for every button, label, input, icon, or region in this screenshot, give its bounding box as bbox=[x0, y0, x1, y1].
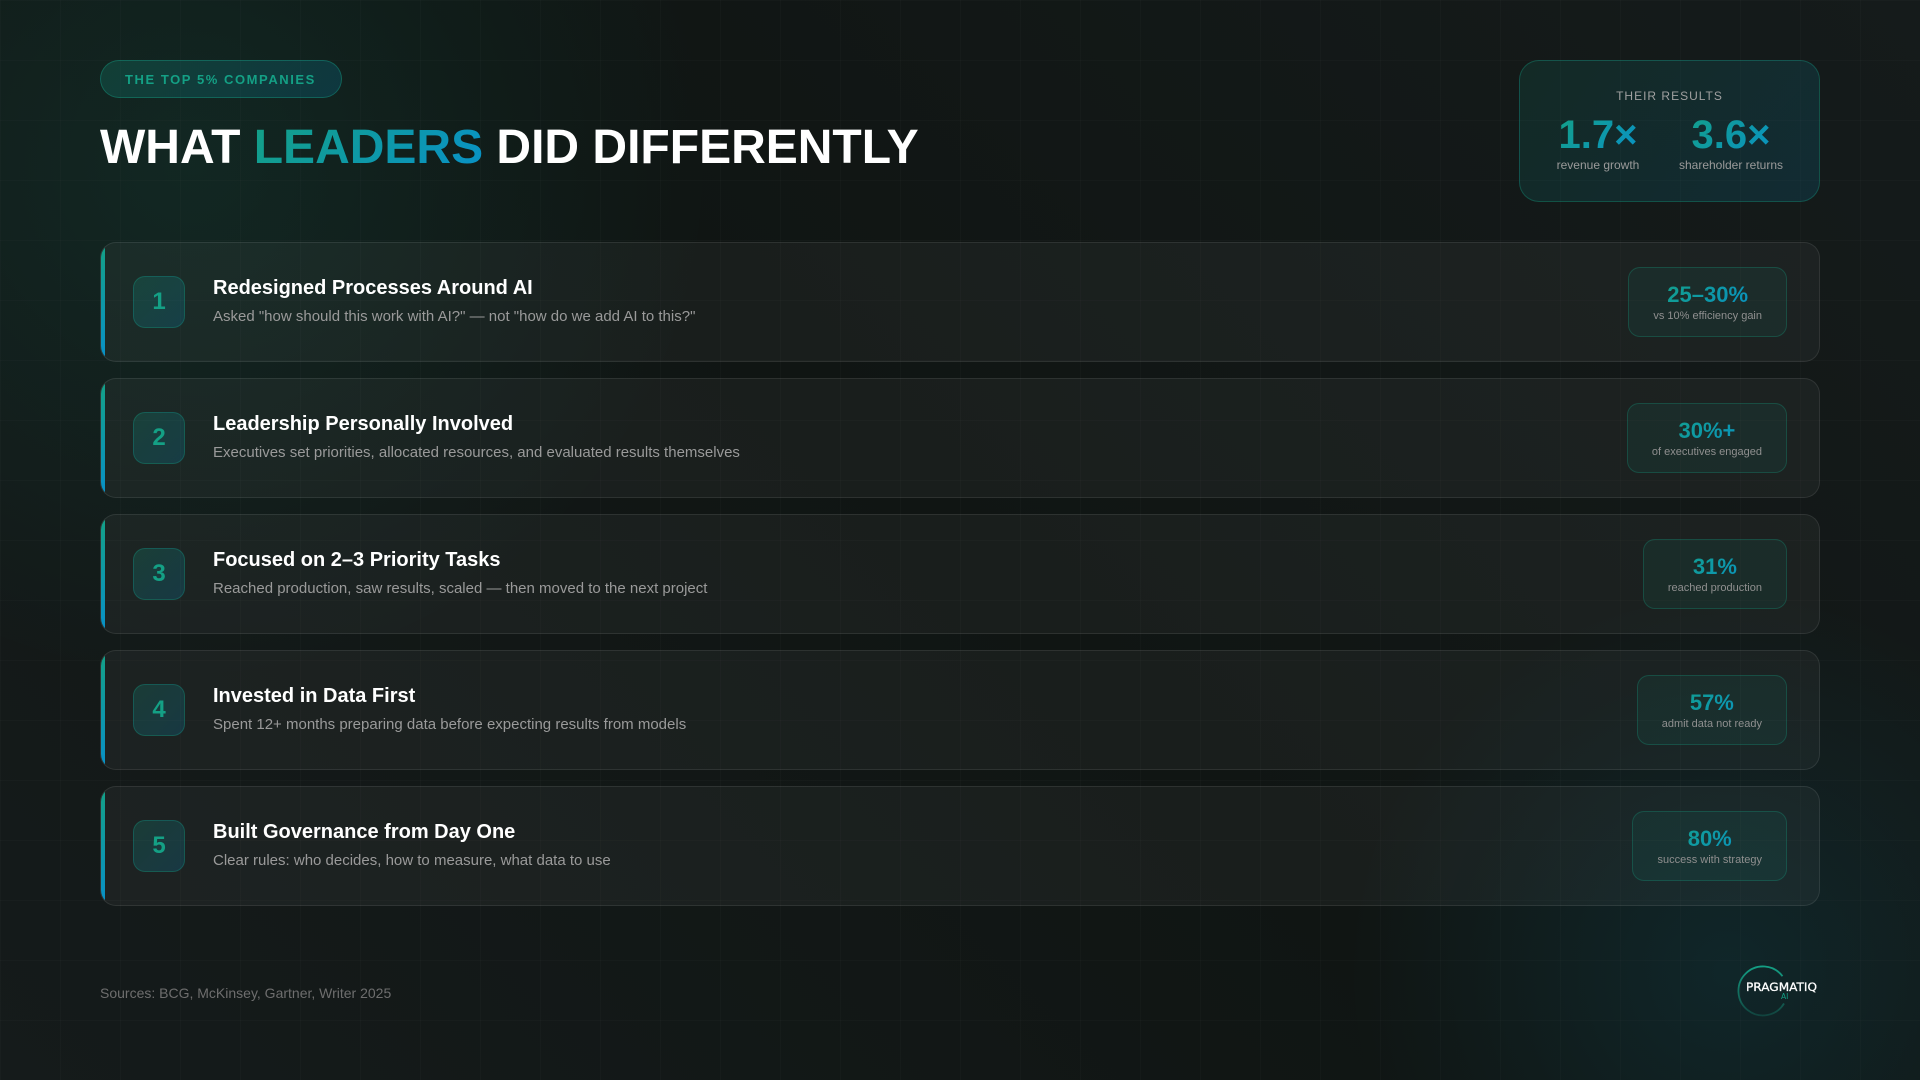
card 1 text bbox=[213, 277, 695, 325]
card 2 text: Leadership Personally Involved bbox=[213, 413, 513, 435]
number badge 1 bbox=[133, 276, 185, 328]
logo: pragmatiq ai: AI bbox=[1781, 992, 1788, 1001]
logo: pragmatiq ai: PRAGMATIQ bbox=[1746, 980, 1817, 994]
card 5 stat: success with strategy bbox=[1657, 854, 1762, 866]
number badge 2: 2 bbox=[152, 424, 166, 451]
logo: pragmatiq ai bbox=[1738, 966, 1817, 1016]
card 2 stat: of executives engaged bbox=[1652, 446, 1762, 458]
card 5 text: Clear rules: who decides, how to measure, what data to use bbox=[213, 852, 611, 869]
card 1: redesigned processes bbox=[100, 242, 1820, 362]
number badge 1: 1 bbox=[152, 288, 166, 315]
card 4 text bbox=[213, 685, 686, 733]
card 1 text: Redesigned Processes Around AI bbox=[213, 277, 533, 299]
number badge 3 bbox=[133, 548, 185, 600]
title: WHAT DID DIFFERENTLY bbox=[100, 121, 919, 174]
number badge 5: 5 bbox=[152, 832, 166, 859]
card 3 stat bbox=[1643, 539, 1787, 609]
stat: shareholder returns: shareholder returns bbox=[1679, 158, 1783, 172]
card 4: data first bbox=[100, 650, 1820, 770]
card 4 text: Invested in Data First bbox=[213, 685, 415, 707]
card 3 text bbox=[213, 549, 708, 597]
stat: shareholder returns: 3.6× bbox=[1692, 113, 1770, 157]
badge: the top 5% companies bbox=[100, 60, 342, 98]
card 2 stat: 30%+ bbox=[1678, 418, 1735, 443]
badge: the top 5% companies: THE TOP 5% COMPANIES bbox=[125, 72, 316, 87]
card 2 text bbox=[213, 413, 740, 461]
card 4 text: Spent 12+ months preparing data before expecting results from models bbox=[213, 716, 686, 733]
title: LEADERS bbox=[254, 121, 483, 174]
stat: revenue growth: 1.7× bbox=[1559, 113, 1637, 157]
card 2 stat bbox=[1627, 403, 1787, 473]
card 2: leadership involved bbox=[100, 378, 1820, 498]
card 5 text: Built Governance from Day One bbox=[213, 821, 515, 843]
card 1 stat: 25–30% bbox=[1667, 282, 1748, 307]
card 3 stat: reached production bbox=[1668, 582, 1762, 594]
card 4 stat: admit data not ready bbox=[1662, 718, 1762, 730]
card 4 stat: 57% bbox=[1690, 690, 1734, 715]
card 2 text: Executives set priorities, allocated resources, and evaluated results themselves bbox=[213, 444, 740, 461]
results label: THEIR RESULTS bbox=[1616, 89, 1723, 103]
panel: their results bbox=[1519, 60, 1820, 202]
number badge 4 bbox=[133, 684, 185, 736]
stat: revenue growth: revenue growth bbox=[1557, 158, 1639, 172]
card 4 stat bbox=[1637, 675, 1787, 745]
stat: shareholder returns bbox=[1679, 113, 1783, 172]
card 5 text bbox=[213, 821, 611, 869]
card 5: governance bbox=[100, 786, 1820, 906]
sources: Sources: BCG, McKinsey, Gartner, Writer 2025 bbox=[100, 985, 391, 1001]
number badge 2 bbox=[133, 412, 185, 464]
card 3 text: Focused on 2–3 Priority Tasks bbox=[213, 549, 501, 571]
number badge 4: 4 bbox=[152, 696, 166, 723]
card 5 stat bbox=[1632, 811, 1787, 881]
card 1 stat bbox=[1628, 267, 1787, 337]
card 3: priority tasks bbox=[100, 514, 1820, 634]
card 1 text: Asked "how should this work with AI?" — not "how do we add AI to this?" bbox=[213, 308, 695, 325]
number badge 5 bbox=[133, 820, 185, 872]
card 3 text: Reached production, saw results, scaled — then moved to the next project bbox=[213, 580, 707, 597]
number badge 3: 3 bbox=[152, 560, 166, 587]
card 1 stat: vs 10% efficiency gain bbox=[1653, 310, 1762, 322]
card 5 stat: 80% bbox=[1688, 826, 1732, 851]
card 3 stat: 31% bbox=[1693, 554, 1737, 579]
